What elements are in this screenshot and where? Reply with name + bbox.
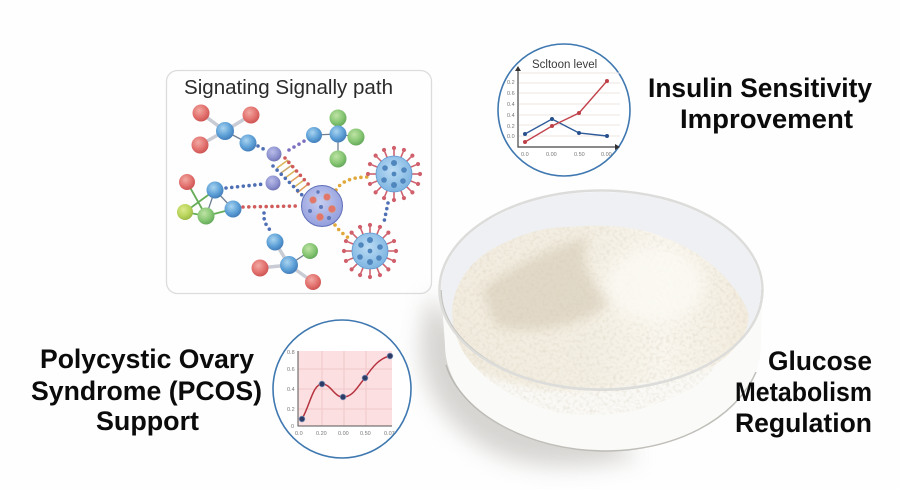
dish front rim [441, 290, 762, 390]
powder smooth highlight [605, 247, 705, 323]
powder lower band [480, 366, 714, 415]
curve [302, 356, 390, 419]
heading: insulin sensitivity: Insulin Sensitivity [648, 73, 872, 103]
y axis labels: 0.6 [507, 91, 515, 97]
panel heading: Signating Signally path [184, 77, 393, 99]
y axis labels: 0 [291, 424, 294, 430]
y axis labels: 0.2 [507, 80, 515, 86]
x axis labels: 0.0 [295, 431, 303, 437]
x axis labels: 0.20 [316, 431, 327, 437]
dish base rim [446, 365, 756, 451]
chart circle [498, 44, 630, 176]
x axis labels: 0.07 [384, 431, 395, 437]
axis arrows [515, 66, 620, 150]
axes [298, 351, 392, 426]
y axis labels: 0.6 [287, 367, 295, 373]
heading: glucose: Glucose [768, 346, 872, 376]
central cell [302, 186, 342, 226]
axes [518, 68, 618, 147]
y axis labels: 0.4 [507, 113, 515, 119]
panel frame [166, 70, 432, 294]
powder dish [440, 190, 762, 451]
chart: solution level line chart [498, 44, 630, 176]
chart: PCOS curve chart [273, 320, 411, 458]
y axis labels: 0.4 [287, 387, 295, 393]
heading: pcos line 2: Syndrome (PCOS) [31, 376, 262, 406]
dish lower wall [441, 290, 762, 451]
x axis labels: 0.00 [338, 431, 349, 437]
y axis labels [507, 80, 515, 140]
chart circle [273, 320, 411, 458]
powder grain [452, 226, 748, 415]
ladder rungs [277, 160, 307, 193]
chart title: Scltoon level [532, 59, 597, 71]
signal nodes: purple [266, 146, 282, 190]
gridlines [519, 73, 620, 136]
molecule: bottom [252, 234, 321, 290]
heading: improvement: Improvement [680, 104, 853, 134]
panel: signaling pathway [166, 70, 432, 294]
powder shaded slope [482, 238, 612, 330]
x axis labels: 0.0 [521, 152, 529, 158]
data points [299, 353, 393, 422]
heading: metabolism: Metabolism [735, 377, 872, 407]
red series [523, 79, 609, 144]
x axis labels: 0.50 [574, 152, 585, 158]
bonds between molecules [185, 113, 356, 282]
gridlines [298, 351, 392, 426]
x axis labels [521, 152, 612, 158]
y axis labels: 0.8 [287, 350, 295, 356]
dotted connectors [226, 140, 388, 239]
y axis labels: 0.2 [287, 407, 295, 413]
y axis labels: 0.4 [507, 102, 515, 108]
powder base [452, 226, 748, 392]
x axis labels: 0.50 [360, 431, 371, 437]
dish shadow [421, 295, 640, 466]
x axis labels: 0.00 [546, 152, 557, 158]
molecule: upper left [192, 104, 260, 154]
y axis labels: 0.2 [507, 124, 515, 130]
y axis labels [287, 350, 295, 430]
blue series [523, 117, 609, 138]
virus particle: lower [342, 223, 398, 279]
molecule: left cluster [177, 174, 242, 224]
dish back rim [440, 190, 762, 390]
x axis labels [295, 431, 395, 437]
heading: pcos line 3: Support [96, 406, 199, 436]
heading: regulation: Regulation [735, 408, 872, 438]
molecule: upper right [306, 110, 364, 168]
virus particle: upper [366, 146, 422, 202]
powder pile [452, 226, 748, 415]
heading: pcos line 1: Polycystic Ovary [40, 344, 254, 374]
dish interior [441, 192, 761, 388]
x axis labels: 0.00 [601, 152, 612, 158]
y axis labels: 0.0 [507, 134, 515, 140]
plot area [298, 351, 392, 426]
